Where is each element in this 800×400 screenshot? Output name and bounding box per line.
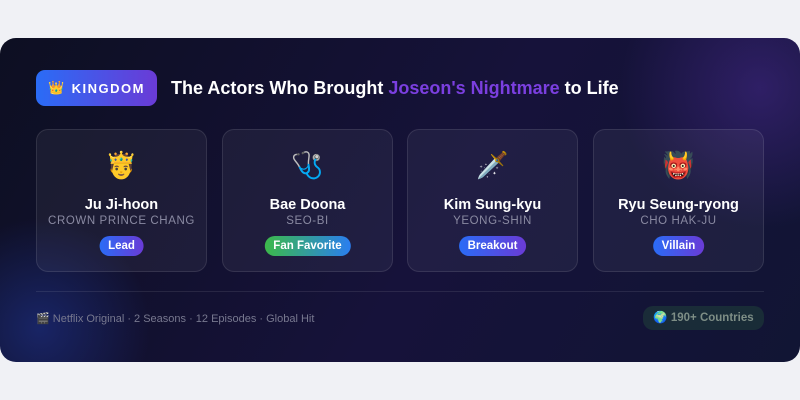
tag: villain: [653, 236, 704, 256]
card: Ryu Seung-ryong: [593, 129, 764, 272]
name: Kim Sung-kyu: [444, 197, 541, 213]
badge: kingdom: 👑: [48, 80, 66, 95]
role: CROWN PRINCE CHANG: [48, 215, 195, 227]
tag: lead: Lead: [108, 240, 135, 252]
footer text: 🎬 Netflix Original · 2 Seasons · 12 Episodes · Global Hit: [36, 313, 314, 325]
title: The Actors Who Brought Joseon's Nightmare to Life: [171, 78, 619, 98]
name: Bae Doona: [270, 197, 345, 213]
tag: fan favorite: [264, 236, 351, 256]
tag: breakout: Breakout: [468, 240, 517, 252]
card: Ju Ji-hoon: [36, 129, 207, 272]
tag: villain: Villain: [662, 240, 695, 252]
icon: stethoscope: 🩺: [291, 150, 324, 180]
icon: ogre: 👹: [662, 150, 695, 180]
tag: lead: [99, 236, 144, 256]
role: YEONG-SHIN: [453, 215, 532, 227]
tag: fan favorite: Fan Favorite: [273, 240, 342, 252]
role: SEO-BI: [286, 215, 329, 227]
card: Bae Doona: [222, 129, 393, 272]
tag: breakout: [459, 236, 526, 256]
icon: prince: 🤴: [105, 150, 138, 180]
name: Ryu Seung-ryong: [618, 197, 739, 213]
pill: countries: 🌍 190+ Countries: [653, 312, 754, 324]
card: Kim Sung-kyu: [407, 129, 578, 272]
role: CHO HAK-JU: [640, 215, 717, 227]
badge: kingdom: KINGDOM: [72, 80, 145, 96]
icon: dagger: 🗡️: [476, 150, 509, 180]
badge: kingdom: [36, 70, 157, 106]
name: Ju Ji-hoon: [85, 197, 158, 213]
pill: countries: [643, 306, 764, 330]
